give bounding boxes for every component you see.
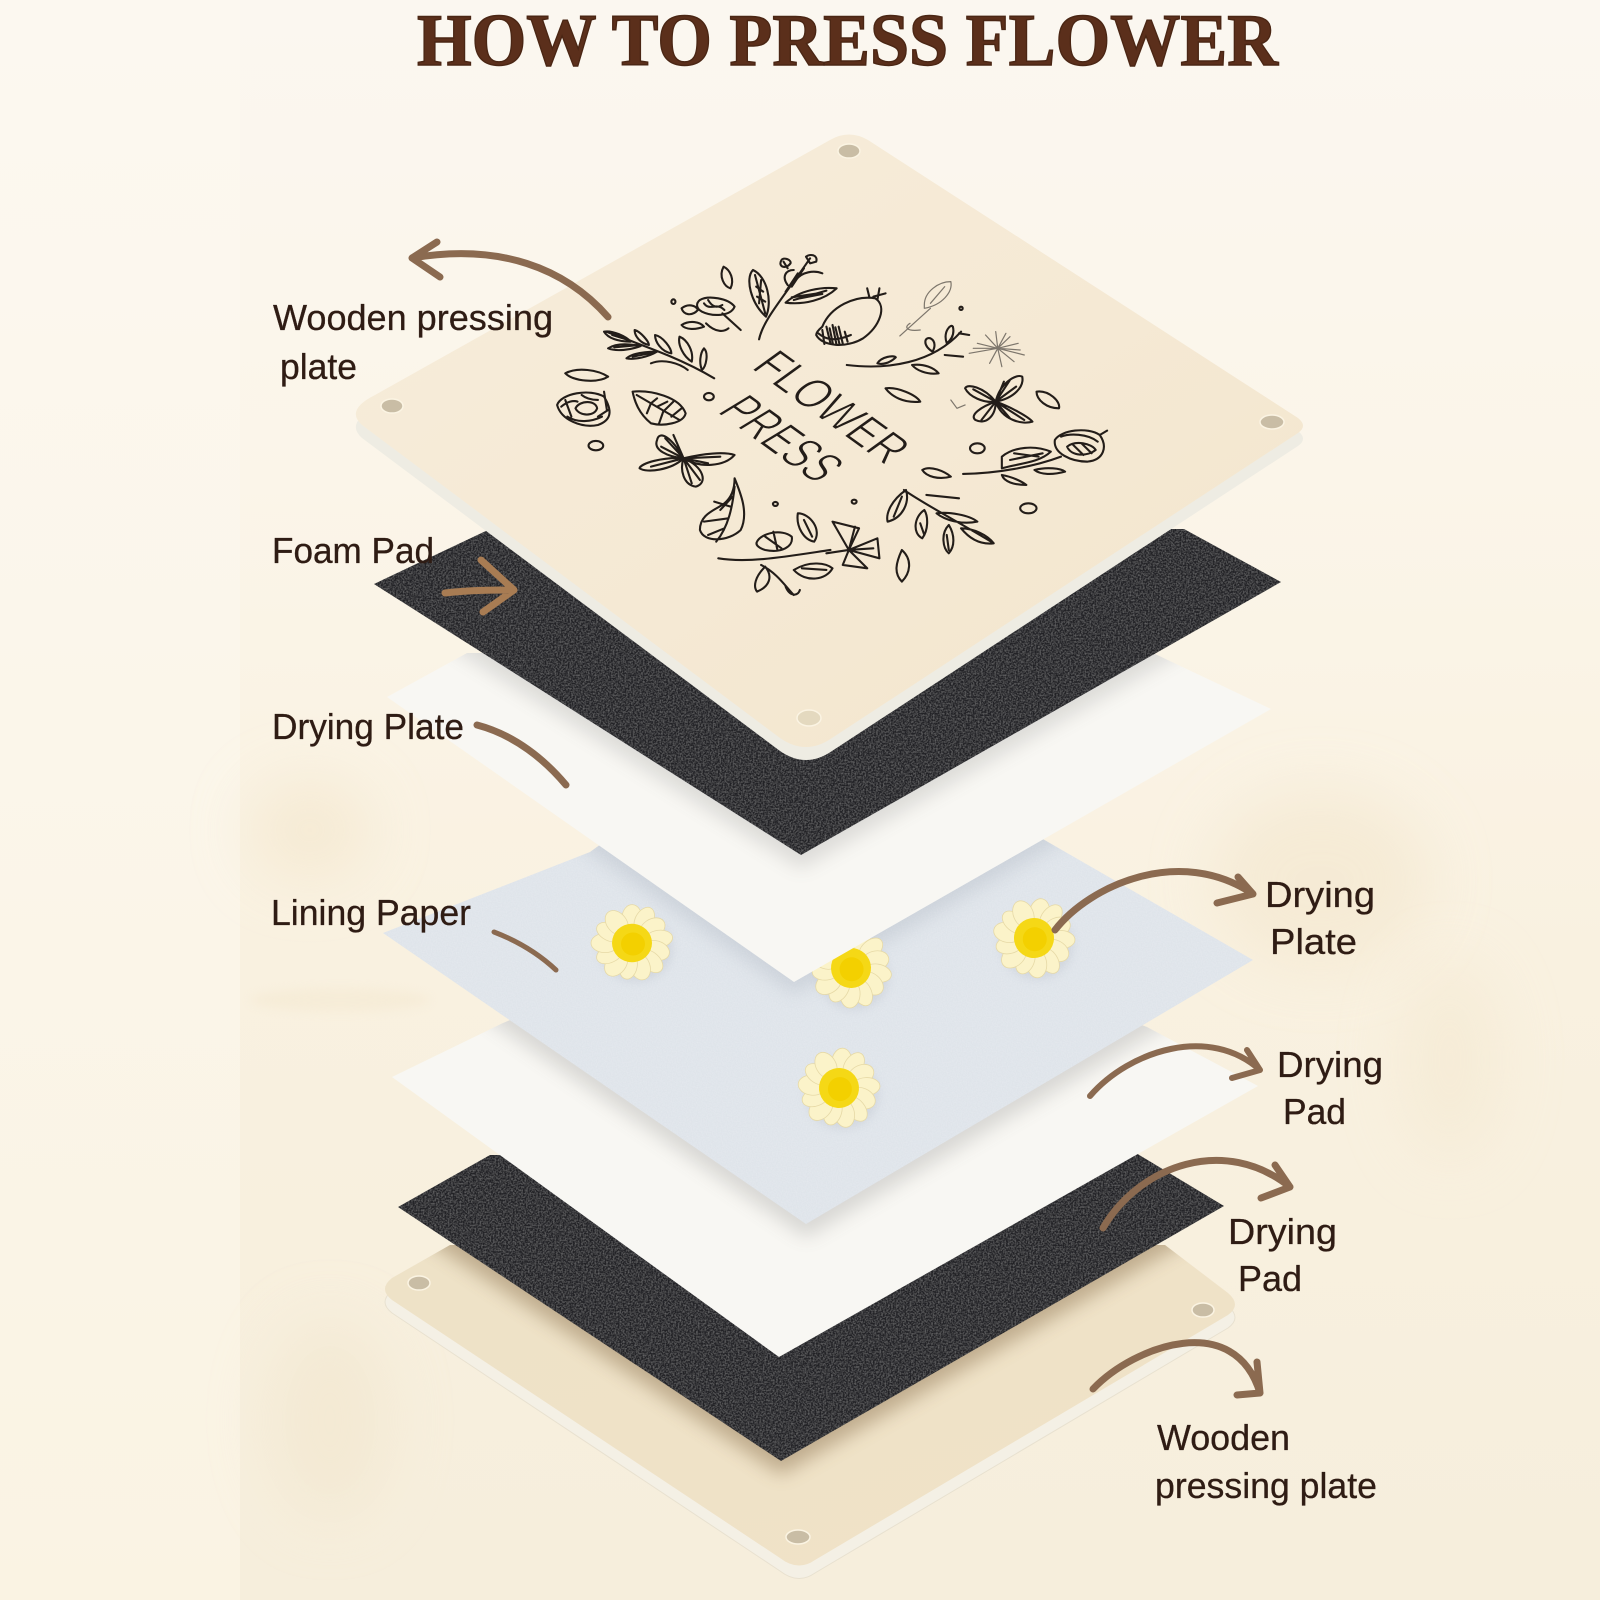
hole bottom	[797, 710, 821, 726]
label: drying plate right: Plate	[1270, 921, 1357, 962]
arrow: drying plate left	[477, 725, 566, 785]
arrow: lining paper	[494, 932, 556, 970]
label: drying plate right: Drying	[1265, 874, 1375, 915]
title: HOW TO PRESS FLOWER	[417, 0, 1279, 82]
lower drying plate	[392, 1020, 1258, 1357]
arrow: drying pad lower	[1103, 1160, 1290, 1228]
upper drying plate	[388, 653, 1270, 982]
hole right	[1260, 415, 1284, 429]
label: drying pad upper: Pad	[1283, 1091, 1346, 1132]
hole bottom	[786, 1530, 810, 1544]
label: wooden pressing plate	[273, 297, 553, 387]
dried flower right	[985, 890, 1083, 987]
label: wooden pressing plate lower: Wooden	[1157, 1417, 1290, 1458]
lining paper	[383, 840, 1252, 1224]
word: press: PRESS	[706, 387, 858, 490]
label: wooden pressing plate lower	[1155, 1417, 1377, 1506]
arrow: wooden pressing plate	[412, 242, 608, 317]
dried flower bottom	[794, 1043, 885, 1133]
label: drying pad lower: Drying	[1228, 1211, 1337, 1252]
label: drying pad lower: Pad	[1238, 1258, 1302, 1299]
bottom wooden pressing plate	[384, 1245, 1236, 1579]
label: drying pad lower	[1228, 1211, 1337, 1299]
upper foam pad	[374, 529, 1281, 855]
label: drying pad upper	[1277, 1044, 1383, 1132]
label: foam pad: Foam Pad	[272, 530, 434, 571]
dried flower under plate	[798, 916, 904, 1021]
label: wooden pressing plate: plate	[280, 346, 357, 387]
arrow: foam pad	[445, 560, 514, 612]
hole left	[381, 399, 403, 413]
label: lining paper: Lining Paper	[271, 892, 471, 933]
label: drying pad upper: Drying	[1277, 1044, 1383, 1085]
hole right	[1192, 1303, 1214, 1317]
label: wooden pressing plate lower: pressing plate	[1155, 1465, 1377, 1506]
top wooden pressing plate	[356, 134, 1303, 760]
arrow: drying plate right	[1055, 872, 1253, 930]
label: wooden pressing plate: Wooden pressing	[273, 297, 553, 338]
flower press wreath drawing	[557, 255, 1107, 595]
dried flower left	[591, 904, 674, 982]
hole left	[408, 1276, 430, 1290]
hole top	[838, 144, 860, 158]
lower foam pad	[398, 1153, 1224, 1461]
arrow: drying pad upper	[1090, 1046, 1260, 1096]
label: drying plate: Drying Plate	[272, 706, 464, 747]
word: flower: FLOWER	[741, 341, 923, 472]
label: drying plate right	[1265, 874, 1375, 962]
arrow: wooden pressing plate lower	[1093, 1343, 1260, 1395]
flower press lettering	[706, 341, 923, 490]
